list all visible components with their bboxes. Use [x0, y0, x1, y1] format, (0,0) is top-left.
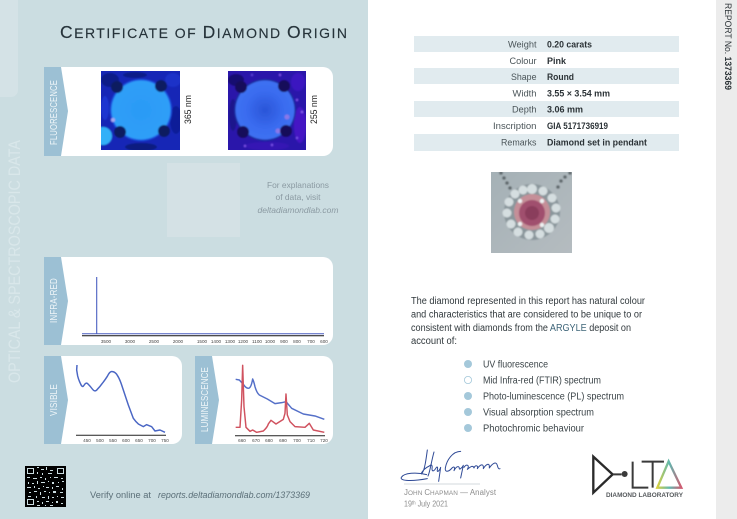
- criteria list: Photochromic behaviour: [483, 424, 585, 434]
- specification table: Remarks: [501, 138, 537, 148]
- side heading: OPTICAL & SPECTROSCOPIC DATA: [5, 139, 24, 383]
- visible chart: 700: [148, 438, 156, 443]
- visible chart: 500: [96, 438, 104, 443]
- visible chart: 750: [161, 438, 169, 443]
- luminescence chart: 700: [293, 438, 301, 443]
- infra-red chart: 1400: [211, 339, 222, 344]
- specification table: Shape: [511, 72, 536, 83]
- specification table: [414, 36, 679, 151]
- signature: [401, 450, 500, 484]
- empty image placeholder: [167, 163, 240, 237]
- fluorescence tab label: FLUORESCENCE: [49, 80, 60, 145]
- origin statement: [411, 296, 646, 347]
- criteria list: Mid Infra-red (FTIR) spectrum: [483, 376, 601, 386]
- origin statement: The diamond represented in this report has natural colour: [411, 296, 646, 307]
- visible chart: [76, 365, 169, 443]
- infra-red chart: 2000: [173, 339, 184, 344]
- QR code: [25, 466, 66, 507]
- logo: Delta Diamond Laboratory: [593, 457, 684, 499]
- specification table: Depth: [512, 104, 536, 116]
- specification table: Weight: [508, 40, 537, 50]
- specification table: Colour: [510, 56, 537, 67]
- panel: infra-red spectrum: [44, 257, 333, 345]
- explanation note: of data, visit: [276, 192, 321, 202]
- specification table: 0.20 carats: [547, 40, 592, 50]
- panel: fluorescence: [44, 67, 333, 156]
- infra-red chart: [82, 277, 328, 344]
- report number: REPORT No. 1373369: [723, 3, 733, 90]
- panel: right sheet: [368, 0, 717, 519]
- visible tab label: VISIBLE: [49, 384, 60, 416]
- explanation note: [258, 180, 339, 215]
- luminescence chart: 710: [307, 438, 315, 443]
- origin statement: and characteristics that are considered to be unique to or: [411, 310, 643, 320]
- infra-red chart: 1300: [225, 339, 236, 344]
- luminescence chart: 680: [265, 438, 273, 443]
- infra-red chart: 2500: [149, 339, 160, 344]
- specification table: GIA 5171736919: [547, 121, 608, 132]
- wavelength label 365 nm: 365 nm: [183, 95, 193, 124]
- analyst name and date: July 2021: [416, 500, 448, 508]
- infra-red chart: 3500: [101, 339, 112, 344]
- specification table: Inscription: [493, 121, 536, 132]
- panel: luminescence spectrum: [195, 356, 333, 444]
- criteria list: UV fluorescence: [483, 360, 548, 370]
- origin statement: account of:: [411, 336, 457, 347]
- criteria list: Visual absorption spectrum: [483, 408, 594, 418]
- infra-red chart: 800: [293, 339, 301, 344]
- analyst name and date: [404, 488, 497, 508]
- visible chart: 550: [109, 438, 117, 443]
- infra-red chart: 600: [320, 339, 328, 344]
- luminescence chart: [235, 365, 328, 443]
- panel: report number strip: [716, 0, 737, 519]
- criteria list: [464, 360, 624, 434]
- image: 255 nm fluorescence: [226, 69, 308, 152]
- specification table: Diamond set in pendant: [547, 138, 648, 148]
- infra-red chart: 700: [307, 339, 315, 344]
- luminescence chart: 660: [238, 438, 246, 443]
- infra-red chart: 900: [280, 339, 288, 344]
- explanation note: deltadiamondlab.com: [258, 205, 339, 215]
- visible chart: 600: [122, 438, 130, 443]
- luminescence chart: 670: [252, 438, 260, 443]
- infra-red chart: 1100: [252, 339, 262, 344]
- specification table: 3.55 × 3.54 mm: [547, 88, 610, 100]
- analyst name and date: JOHN CHAPMAN — Analyst: [404, 488, 497, 497]
- specification table: Width: [512, 88, 536, 100]
- wavelength label 255 nm: 255 nm: [309, 95, 319, 124]
- explanation note: For explanations: [267, 180, 329, 190]
- logo caption: DIAMOND LABORATORY: [606, 492, 684, 499]
- analyst name and date: 19: [404, 500, 413, 508]
- infra-red tab label: INFRA-RED: [49, 278, 60, 323]
- panel: visible spectrum: [44, 356, 182, 444]
- decorative page tab: [0, 0, 18, 97]
- specification table: 3.06 mm: [547, 104, 583, 116]
- panel: left background: [0, 0, 368, 519]
- verify online text: [90, 490, 311, 501]
- criteria list: Photo-luminescence (PL) spectrum: [483, 392, 624, 402]
- luminescence tab label: LUMINESCENCE: [200, 367, 211, 432]
- image: 365 nm fluorescence: [101, 71, 180, 150]
- visible chart: 450: [83, 438, 91, 443]
- verify online text: Verify online at: [90, 490, 151, 501]
- luminescence chart: 720: [320, 438, 328, 443]
- verify online text: reports.deltadiamondlab.com/1373369: [158, 490, 311, 501]
- infra-red chart: 1200: [238, 339, 249, 344]
- infra-red chart: 1000: [265, 339, 276, 344]
- visible chart: 650: [135, 438, 143, 443]
- specification table: Round: [547, 72, 574, 83]
- specification table: Pink: [547, 56, 567, 67]
- luminescence chart: 690: [279, 438, 287, 443]
- analyst name and date: th: [412, 500, 416, 506]
- title: CERTIFICATE OF DIAMOND ORIGIN: [60, 22, 347, 42]
- photo: pink diamond pendant: [489, 170, 574, 255]
- infra-red chart: 3000: [125, 339, 136, 344]
- origin statement: consistent with diamonds from the ARGYLE deposit on: [411, 323, 631, 334]
- infra-red chart: 1500: [197, 339, 208, 344]
